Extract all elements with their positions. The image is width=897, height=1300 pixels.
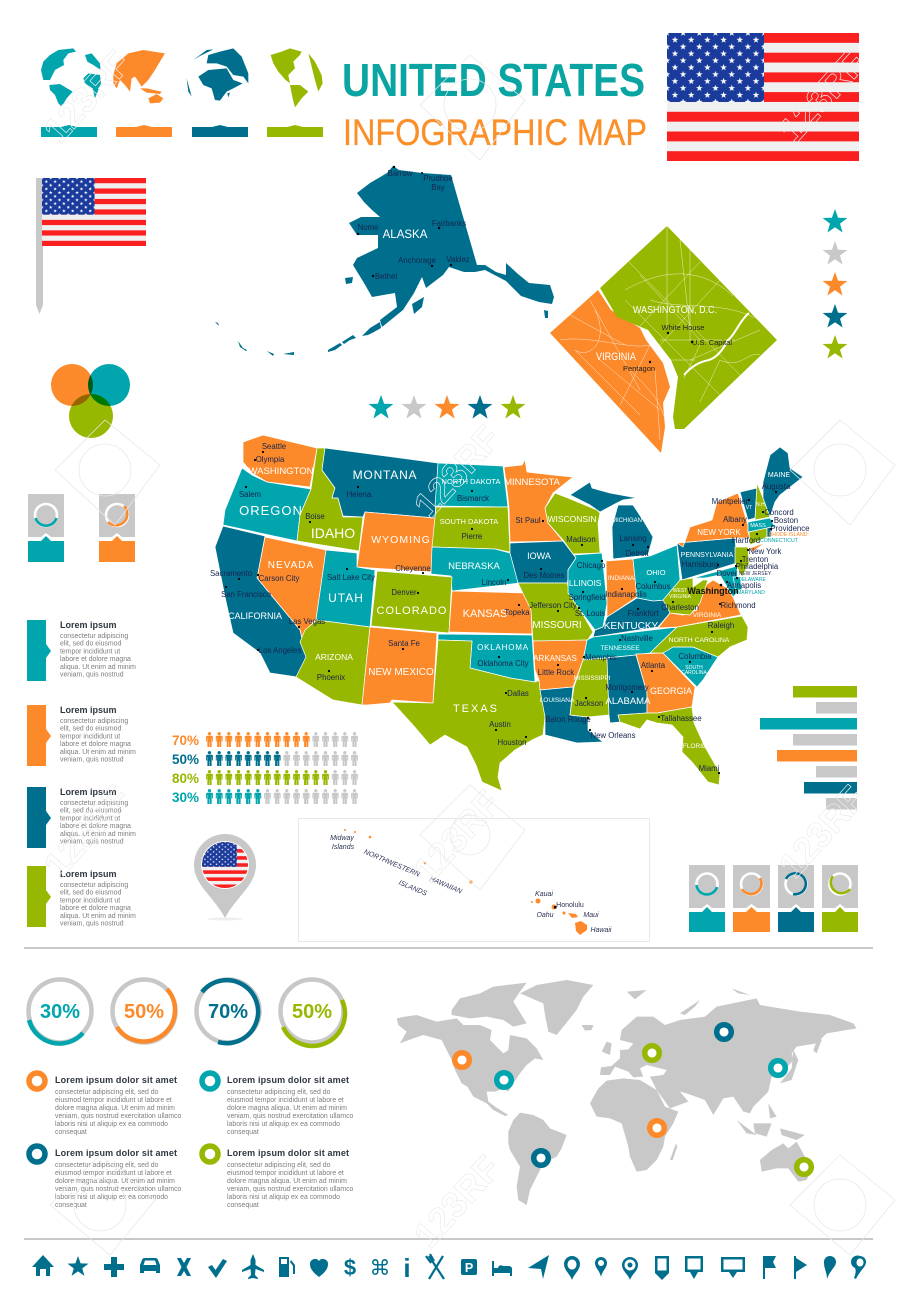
state labels: OKLAHOMA — [477, 643, 529, 652]
panel: Hawaii inset: NORTHWESTERN — [363, 849, 421, 879]
state labels: CAROLINA — [681, 670, 707, 676]
map: Alaska: Bethel — [375, 272, 397, 281]
city labels: Seattle — [262, 442, 286, 451]
icon: parking — [461, 1259, 477, 1275]
text block 3: elit, sed do eiusmod — [60, 808, 121, 815]
city labels: Hartford — [732, 536, 760, 545]
state labels: VIRGINIA — [669, 594, 692, 600]
panel: Hawaii inset: Oahu — [536, 912, 554, 919]
legend: green: consectetur adipiscing elit, sed do — [227, 1162, 331, 1169]
city labels: Houston — [497, 738, 527, 747]
icon: plane — [242, 1254, 264, 1279]
icon: pennant — [794, 1256, 807, 1279]
text block 1: elit, sed do eiusmod — [60, 641, 121, 648]
gauge cards — [689, 865, 858, 932]
state labels: WYOMING — [371, 534, 431, 546]
text block 4: veniam, quis nostrud — [60, 920, 124, 928]
gauge: green — [822, 865, 858, 932]
legend: green: Lorem ipsum dolor sit amet — [227, 1148, 349, 1158]
legend: dark teal: consectetur adipiscing elit, sed do — [55, 1162, 159, 1169]
row 80%: 80% — [172, 771, 199, 786]
legend: dark teal: Lorem ipsum dolor sit amet — [55, 1148, 177, 1158]
text block 4: tempor incididunt ut — [60, 897, 120, 904]
state shapes — [215, 435, 803, 791]
city labels — [210, 442, 810, 773]
icon: fork and knife — [426, 1254, 444, 1279]
city labels: Boise — [305, 512, 325, 521]
text block 3: Lorem ipsum — [60, 787, 117, 797]
world pins — [455, 1025, 811, 1174]
watermarks: 123RF — [405, 783, 508, 890]
icon: square bubble — [685, 1256, 703, 1279]
city labels: Columbus — [635, 582, 671, 591]
state labels: NEW MEXICO — [368, 667, 434, 678]
text block 1 — [27, 620, 136, 681]
icon row — [32, 1253, 866, 1283]
state labels: GEORGIA — [650, 686, 692, 696]
city labels: Philadelphia — [736, 562, 779, 571]
legend: orange: dolore magna aliqua. Ut enim ad minim — [55, 1105, 175, 1112]
icon: plus — [104, 1257, 124, 1277]
text block 1: veniam, quis nostrud — [60, 672, 124, 678]
text block 2: labore et dolore magna — [60, 741, 131, 748]
icon: bed — [492, 1261, 512, 1276]
globe: dark teal Africa — [187, 48, 248, 101]
legend: orange: consectetur adipiscing elit, sed do — [55, 1089, 159, 1096]
city labels: Cheyenne — [395, 564, 431, 573]
main US map — [210, 435, 810, 791]
city labels: Providence — [770, 524, 810, 533]
state labels: UTAH — [328, 591, 364, 605]
world land — [397, 980, 857, 1205]
row 30%: 30% — [172, 790, 199, 805]
legend: green: veniam, quis nostrud exercitation ullamco — [227, 1186, 354, 1193]
state labels: NEVADA — [268, 560, 314, 571]
state labels: WEST — [673, 588, 687, 594]
watermarks: 123RF — [35, 778, 138, 885]
gauge: orange — [733, 865, 770, 932]
state labels: SOUTH DAKOTA — [440, 517, 498, 526]
state labels: NEW YORK — [697, 528, 741, 537]
state labels: IDAHO — [311, 525, 355, 541]
state labels: OHIO — [646, 568, 666, 577]
city labels: Baton Rouge — [545, 715, 591, 724]
state labels: MARYLAND — [737, 590, 765, 596]
icon: target pin — [622, 1257, 638, 1280]
row 30% — [172, 789, 358, 805]
legend: orange — [29, 1073, 182, 1136]
world map — [397, 980, 857, 1205]
state labels: VT — [746, 505, 752, 511]
state labels: KENTUCKY — [604, 621, 659, 632]
legend: orange: eiusmod tempor incididunt ut labore et — [55, 1097, 172, 1104]
city labels: Charleston — [661, 603, 699, 612]
city labels: Tallahassee — [660, 714, 702, 723]
icon: check — [208, 1259, 227, 1278]
state labels: ARKANSAS — [533, 654, 577, 663]
state labels: NORTH DAKOTA — [442, 477, 500, 486]
map: Alaska: Anchorage — [398, 256, 436, 265]
city labels: Raleigh — [708, 621, 734, 630]
text block 4: aliqua. Ut enim ad minim — [60, 913, 136, 920]
city labels: St. Louis — [575, 609, 605, 618]
map: Washington D.C. diamond: White House — [662, 323, 704, 332]
icon: filled pin — [824, 1256, 836, 1279]
map: Washington D.C. diamond: Pentagon — [623, 364, 655, 373]
text block 1: Lorem ipsum — [60, 620, 117, 630]
icon: heart — [310, 1259, 328, 1277]
text block 4: elit, sed do eiusmod — [60, 890, 121, 897]
icon: wide bubble — [721, 1257, 745, 1278]
city labels: Oklahoma City — [477, 659, 529, 668]
state labels: IOWA — [527, 551, 551, 561]
text block 4 — [27, 866, 136, 928]
state labels: ARIZONA — [315, 652, 353, 662]
panel: Hawaii inset: Honolulu — [556, 902, 584, 909]
city labels: Los Angeles — [259, 646, 301, 655]
map: Alaska: Prudhoe — [423, 174, 453, 183]
text block 1: tempor incididunt ut — [60, 648, 120, 655]
state labels: MICHIGAN — [612, 518, 642, 524]
city labels: Santa Fe — [388, 639, 420, 648]
icon: small pin — [595, 1257, 607, 1277]
gauge: teal — [689, 865, 725, 932]
panel: Hawaii inset: Kauai — [535, 891, 553, 898]
globes row — [41, 48, 323, 107]
city labels: Indianapolis — [605, 590, 647, 599]
left gauge: orange — [99, 494, 135, 562]
horizontal bars — [760, 686, 857, 810]
state labels: COLORADO — [377, 605, 447, 617]
legend: teal: veniam, quis nostrud exercitation ullamco — [227, 1113, 354, 1120]
city labels: San Francisco — [221, 590, 272, 599]
icon: parking: P — [465, 1261, 473, 1275]
state labels: N.H. — [756, 502, 766, 508]
small flag on pole — [36, 178, 146, 314]
state labels: RHODE ISLAND — [769, 532, 808, 538]
row 50% — [172, 751, 358, 767]
map: Alaska: Valdez — [446, 255, 470, 264]
panel: Hawaii inset: ISLANDS — [397, 880, 428, 898]
city labels: Augusta — [762, 482, 791, 491]
city labels: Salem — [239, 490, 261, 499]
panel: Hawaii inset: Hawaii — [590, 927, 612, 934]
panel: Hawaii inset: Islands — [332, 844, 355, 851]
legend: dark teal: dolore magna aliqua. Ut enim ad minim — [55, 1178, 175, 1185]
city labels: Springfield — [569, 593, 605, 602]
text block 2: Lorem ipsum — [60, 705, 117, 715]
row 80% — [172, 770, 358, 786]
city labels: Des Moines — [523, 571, 565, 580]
legend: green: dolore magna aliqua. Ut enim ad minim — [227, 1178, 347, 1185]
legend: teal: consequat — [227, 1129, 259, 1136]
city labels: Chicago — [577, 561, 606, 570]
watermarks: 123RF — [770, 778, 873, 885]
state labels: OREGON — [239, 503, 303, 518]
icon: info: i — [403, 1253, 411, 1283]
legend: orange: consequat — [55, 1129, 87, 1136]
donut: 50% orange — [112, 980, 176, 1042]
city labels: Montpelier — [712, 497, 749, 506]
venn diagram — [51, 364, 130, 438]
state labels: SOUTH — [685, 665, 703, 671]
watermarks: 123RF — [35, 43, 138, 150]
city labels: Dallas — [507, 689, 529, 698]
state labels: MAINE — [768, 472, 790, 479]
row 70% — [172, 732, 358, 748]
donut: 30%: 30% — [40, 1001, 80, 1023]
state labels: TEXAS — [453, 703, 499, 715]
watermarks: 123RF — [405, 418, 508, 525]
map: Washington D.C. diamond — [550, 226, 777, 453]
map: Alaska: Bay — [431, 183, 445, 192]
row 50%: 50% — [172, 752, 199, 767]
donut: 50% green: 50% — [292, 1001, 332, 1023]
city labels: Detroit — [626, 549, 649, 558]
map: Washington D.C. diamond: U.S. Capital — [692, 338, 732, 347]
text block 3: consectetur adipiscing — [60, 800, 128, 807]
city labels: Memphis — [585, 653, 617, 662]
text block 2: aliqua. Ut enim ad minim — [60, 749, 136, 756]
text block 3 — [27, 787, 136, 848]
legend: teal — [202, 1073, 354, 1136]
state labels: LOUISIANA — [540, 697, 575, 704]
legend: orange: Lorem ipsum dolor sit amet — [55, 1075, 177, 1085]
left gauge: teal — [28, 494, 64, 562]
map: Alaska: Nome — [358, 223, 378, 232]
gauge: dark teal — [778, 865, 814, 932]
panel: Hawaii inset: Midway — [330, 835, 354, 842]
state labels: MASS — [750, 523, 766, 529]
city labels: Miami — [699, 764, 720, 773]
donut: 70% — [196, 980, 260, 1043]
state labels: KANSAS — [463, 608, 507, 620]
city labels: Topeka — [504, 608, 530, 617]
state labels: CONNECTICUT — [760, 538, 799, 544]
panel: Hawaii inset: HAWAIIAN — [428, 876, 464, 896]
state labels — [228, 466, 808, 750]
state labels: VIRGINIA — [693, 612, 722, 619]
legend: teal: eiusmod tempor incididunt ut labore et — [227, 1097, 344, 1104]
text block 2: tempor incididunt ut — [60, 733, 120, 740]
text block 3: labore et dolore magna — [60, 823, 131, 830]
state labels: CALIFORNIA — [228, 611, 282, 621]
state labels: NEBRASKA — [448, 561, 501, 572]
city labels: New Orleans — [590, 731, 636, 740]
icon: car — [140, 1258, 160, 1273]
star column — [823, 209, 847, 358]
text block 3: veniam, quis nostrud — [60, 838, 124, 846]
text block 3: aliqua. Ut enim ad minim — [60, 831, 136, 838]
city labels: Salt Lake City — [327, 573, 375, 582]
city labels: Lansing — [619, 534, 647, 543]
city labels: Bismarck — [457, 494, 489, 503]
state labels: ALABAMA — [606, 696, 651, 707]
map: Washington D.C. diamond: VIRGINIA — [596, 351, 637, 363]
text block 2: veniam, quis nostrud — [60, 756, 124, 764]
icon: house — [32, 1255, 54, 1276]
state labels: NEW JERSEY — [739, 571, 772, 577]
city labels: Sacramento — [210, 569, 253, 578]
city labels: Montgomery — [605, 683, 649, 692]
title — [342, 54, 647, 153]
people chart — [172, 732, 358, 805]
map: Alaska: Barrow — [388, 169, 413, 178]
legend: dark teal — [29, 1146, 182, 1209]
legend: dark teal: eiusmod tempor incididunt ut labore et — [55, 1170, 172, 1177]
legend: dark teal: veniam, quis nostrud exercitation ullamco — [55, 1186, 182, 1193]
city labels: Pierre — [462, 532, 482, 541]
city labels: Washington — [687, 586, 739, 596]
text block 2 — [27, 705, 136, 766]
large US flag — [667, 33, 859, 161]
text block 4: labore et dolore magna — [60, 905, 131, 912]
globe: green Americas — [271, 48, 323, 107]
text block 4: Lorem ipsum — [60, 869, 117, 879]
state labels: NORTH CAROLINA — [669, 637, 730, 644]
icon: fuel pump — [279, 1257, 295, 1277]
city labels: Annapolis — [727, 581, 761, 590]
state labels: MINNESOTA — [504, 477, 561, 488]
legend: dark teal: consequat — [55, 1202, 87, 1209]
icon: magnifier pin — [851, 1256, 866, 1279]
map: Alaska: Fairbanks — [432, 219, 466, 228]
legend: teal: laboris nisi ut aliquip ex ea commodo — [227, 1121, 340, 1128]
legend: dark teal: laboris nisi ut aliquip ex ea commodo — [55, 1194, 168, 1201]
row 70%: 70% — [172, 733, 199, 748]
icon: tag pin — [655, 1256, 669, 1280]
state labels: MISSOURI — [532, 620, 582, 631]
city labels: Albany — [723, 515, 747, 524]
city labels: Jefferson City — [529, 601, 577, 610]
title: UNITED STATES — [342, 54, 645, 106]
text block 3: tempor incididunt ut — [60, 815, 120, 822]
text block 4: consectetur adipiscing — [60, 882, 128, 889]
city labels: Madison — [566, 535, 596, 544]
legend: orange: veniam, quis nostrud exercitation ullamco — [55, 1113, 182, 1120]
watermarks: 123RF — [405, 1148, 508, 1255]
city labels: Richmond — [720, 601, 756, 610]
state labels: ILLINOIS — [567, 578, 602, 588]
state labels: WASHINGTON — [249, 466, 314, 477]
panel: Hawaii inset: Maui — [583, 912, 599, 919]
text block 1: consectetur adipiscing — [60, 633, 128, 640]
city labels: Trenton — [742, 555, 768, 564]
state labels: PENNSYLVANIA — [681, 552, 734, 559]
city labels: Nashville — [621, 634, 653, 643]
state labels: WISCONSIN — [547, 514, 597, 524]
icon: dollar: $ — [344, 1255, 356, 1280]
city labels: Little Rock — [538, 668, 574, 677]
city labels: Denver — [391, 588, 417, 597]
state labels: MISSISSIPPI — [574, 675, 611, 682]
legend: teal: Lorem ipsum dolor sit amet — [227, 1075, 349, 1085]
text block 1: aliqua. Ut enim ad minim — [60, 664, 136, 671]
watermarks: 123RF — [770, 43, 873, 150]
legend: orange: laboris nisi ut aliquip ex ea commodo — [55, 1121, 168, 1128]
text block 2: elit, sed do eiusmod — [60, 726, 121, 733]
city labels: Atlanta — [641, 661, 666, 670]
city labels: Jackson — [575, 699, 603, 708]
city dots — [225, 451, 777, 774]
legend: green — [202, 1146, 354, 1209]
city labels: Olympia — [256, 455, 285, 464]
city labels: Austin — [489, 720, 511, 729]
map: Alaska: ALASKA — [383, 229, 428, 241]
city labels: Helena — [347, 490, 372, 499]
city labels: Concord — [764, 508, 794, 517]
legend: teal: consectetur adipiscing elit, sed do — [227, 1089, 331, 1096]
city labels: New York — [749, 547, 782, 556]
donut: 50% orange: 50% — [124, 1001, 164, 1023]
icon: star — [67, 1256, 89, 1276]
state labels: FLORIDA — [683, 743, 712, 750]
city labels: Harrisburg — [682, 560, 718, 569]
map: Alaska — [215, 166, 554, 356]
icon: flag — [763, 1256, 776, 1279]
legend: teal: dolore magna aliqua. Ut enim ad minim — [227, 1105, 347, 1112]
city labels: Columbia — [679, 652, 712, 661]
text block 1: labore et dolore magna — [60, 656, 131, 663]
city labels: St Paul — [515, 516, 541, 525]
city labels: Las Vegas — [289, 617, 325, 626]
flag map pin — [194, 834, 256, 920]
icon: command: ⌘ — [370, 1256, 390, 1280]
map: Washington D.C. diamond: WASHINGTON, D.C. — [633, 304, 717, 316]
state labels: TENNESSEE — [600, 645, 640, 652]
donut: 50% green — [280, 980, 345, 1046]
panel: Hawaii inset — [298, 818, 650, 942]
state labels: INDIANA — [608, 575, 635, 582]
state labels: DELAWARE — [738, 577, 767, 583]
city labels: Phoenix — [317, 673, 345, 682]
star row — [369, 395, 525, 418]
icon: navigation arrow — [528, 1255, 549, 1279]
state labels: MONTANA — [353, 468, 417, 482]
city labels: Carson City — [259, 574, 299, 583]
donut: 70%: 70% — [208, 1001, 248, 1023]
title: INFOGRAPHIC MAP — [343, 111, 647, 153]
legend: green: consequat — [227, 1202, 259, 1209]
globe base bars — [41, 125, 323, 137]
icon: cross — [177, 1258, 191, 1276]
globe: orange Asia — [113, 50, 165, 103]
legend: green: laboris nisi ut aliquip ex ea commodo — [227, 1194, 340, 1201]
city labels: Frankfort — [627, 609, 659, 618]
donut: 30% — [28, 980, 92, 1044]
globe: teal Americas — [41, 48, 101, 107]
legend: green: eiusmod tempor incididunt ut labore et — [227, 1170, 344, 1177]
city labels: Dover — [717, 569, 738, 578]
city labels: Boston — [774, 516, 798, 525]
text block 2: consectetur adipiscing — [60, 718, 128, 725]
icon: map pin ring — [564, 1256, 580, 1280]
city labels: Lincoln — [482, 578, 506, 587]
